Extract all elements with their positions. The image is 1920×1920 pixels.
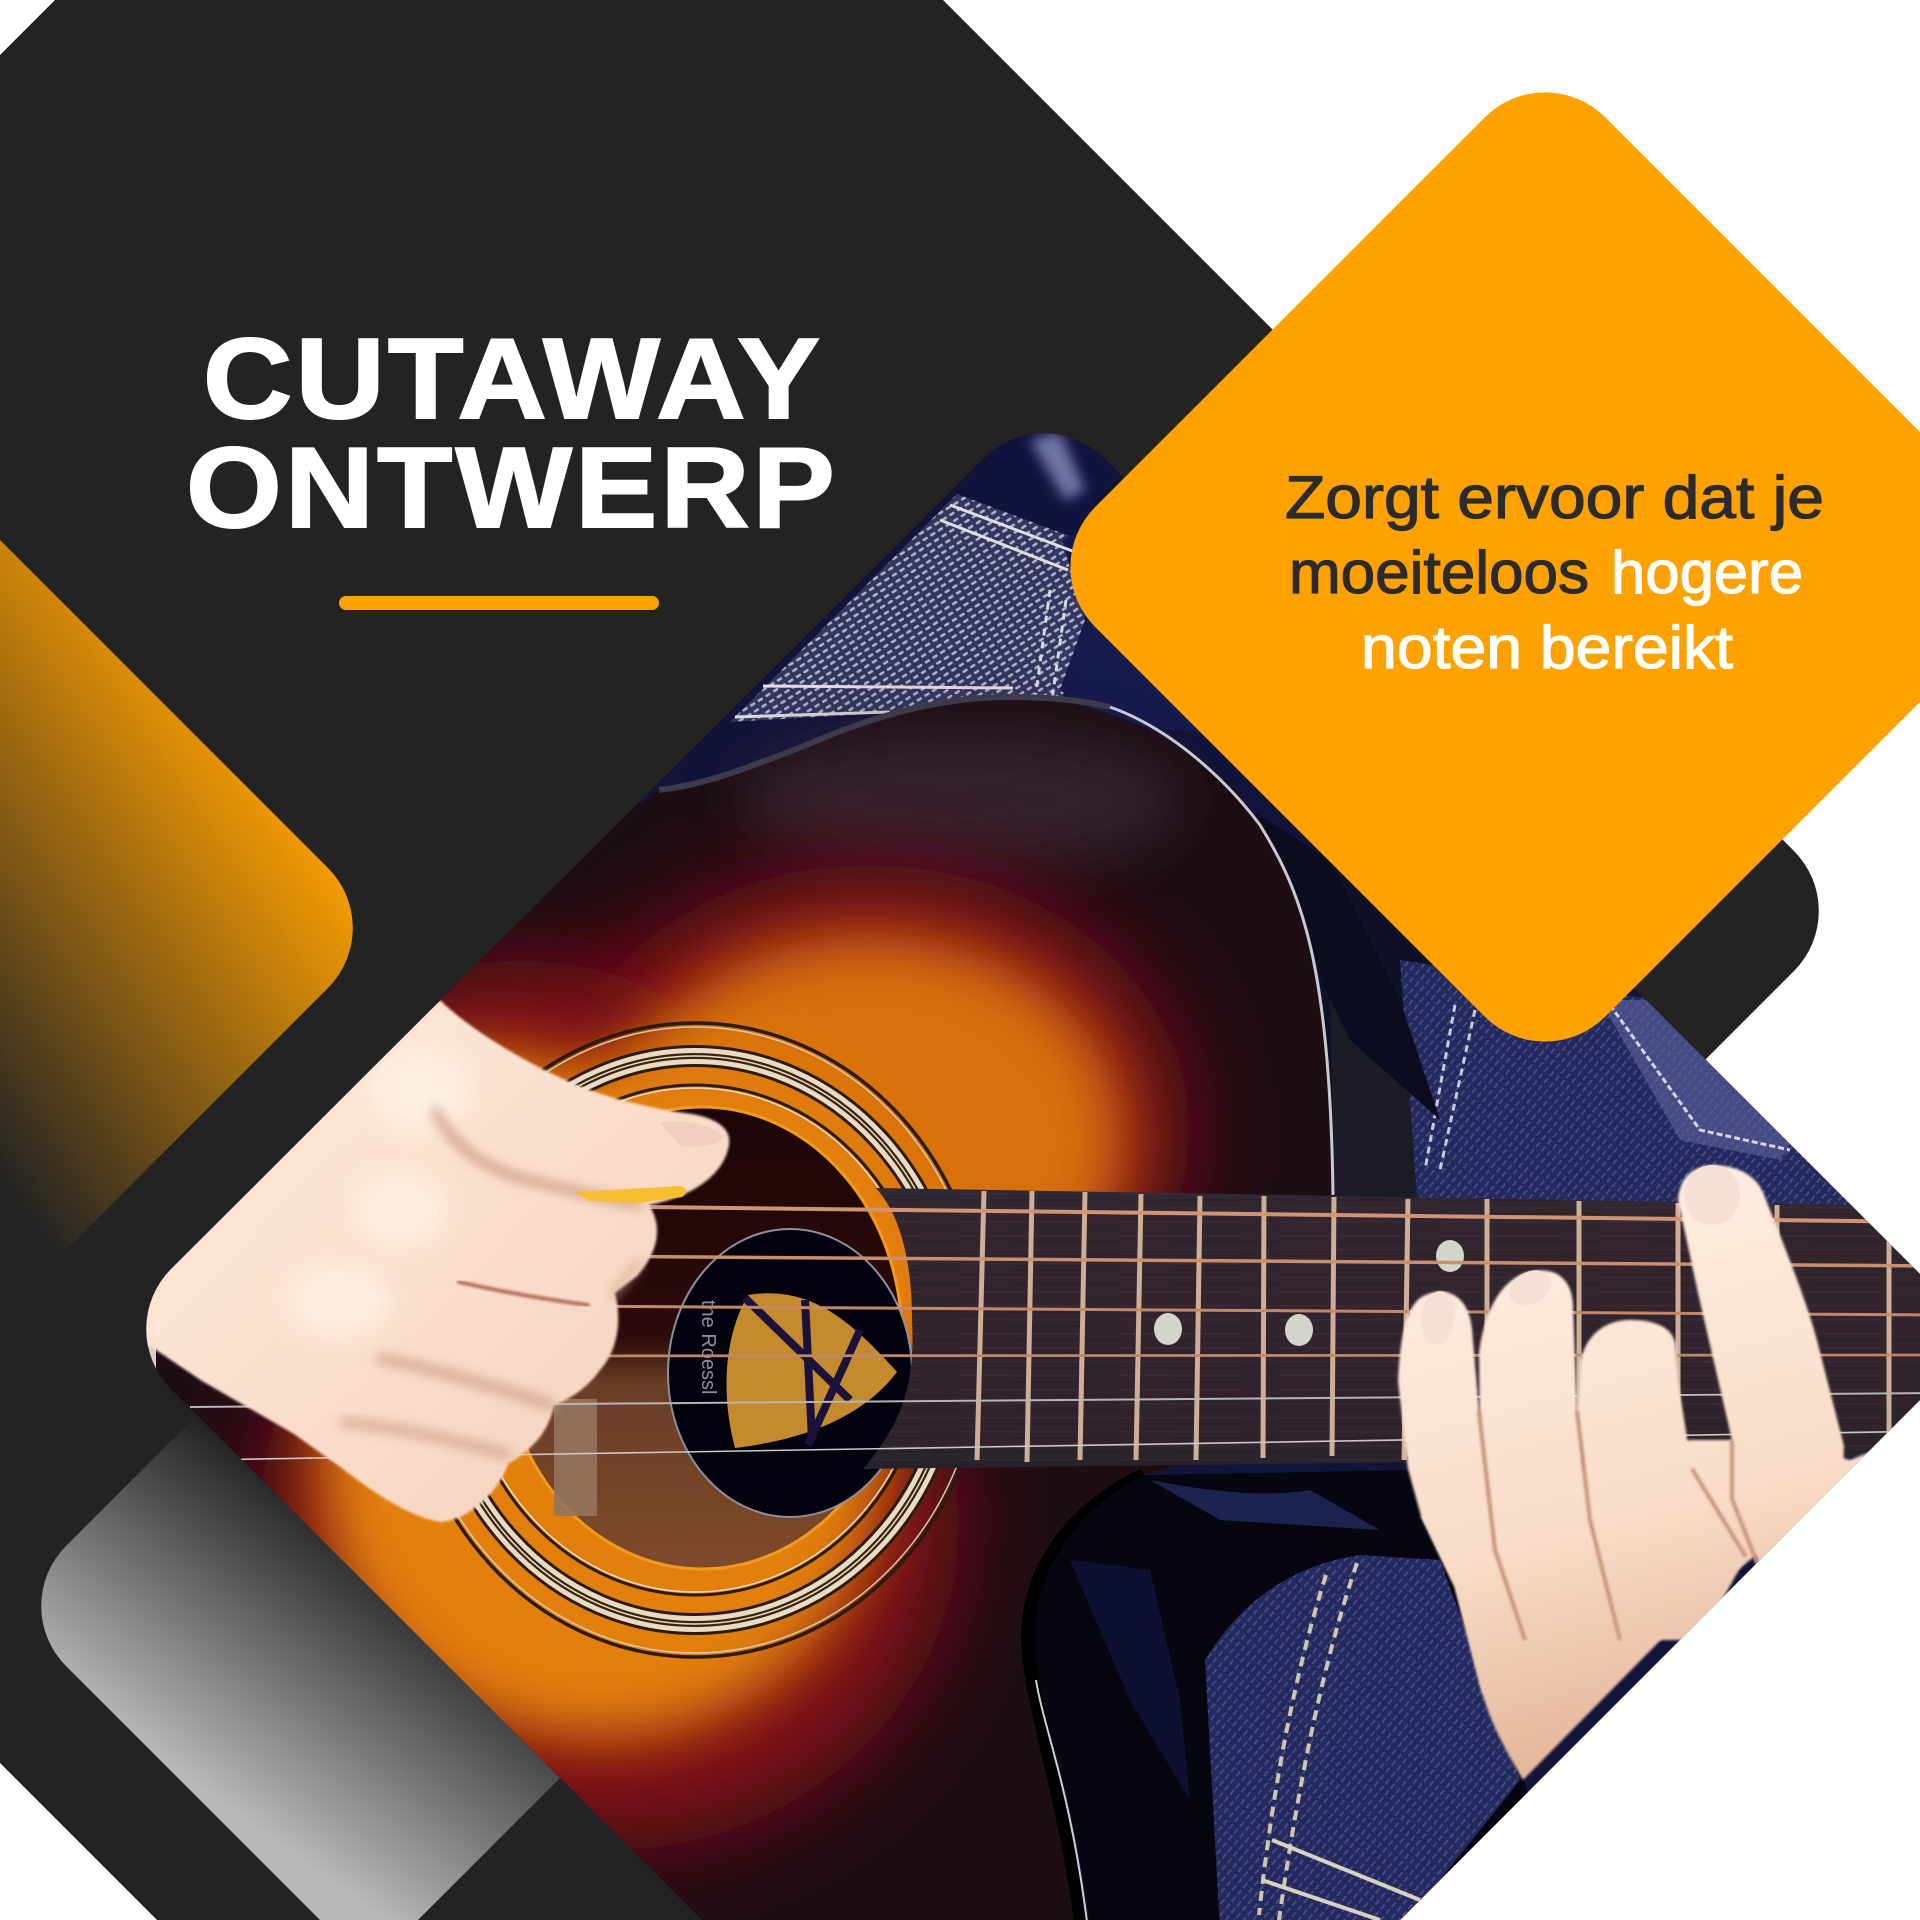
frets [977,1191,1889,1462]
inlay dots [1154,1240,1464,1346]
lower jeans and folds [1034,1470,1530,1920]
title: ONTWERP [186,425,838,552]
palm [1421,1440,1900,1780]
thumb and finger creases [343,1111,640,1455]
callout text: noten bereikt [1361,614,1733,681]
callout text: moeiteloos [1289,539,1589,606]
jeans upper textured patch [730,433,1202,734]
denim background [633,434,1920,1920]
title: CUTAWAY [203,316,823,443]
thumbnail [660,1121,724,1147]
photo: guitar player [100,380,1920,1920]
finger shadows [1479,1411,1760,1640]
callout text [1285,464,1824,681]
pinky [1678,1165,1844,1590]
orange callout diamond [1035,57,1920,1077]
callout text: hogere [1611,539,1803,606]
fingernails [1417,1165,1740,1347]
soundhole label [668,1229,912,1517]
title underline [339,596,659,610]
callout text: Zorgt ervoor dat je [1285,464,1824,531]
right fretting hand [1398,1165,1900,1780]
guitar body with sunburst [100,697,1333,1920]
soundhole [502,1107,902,1569]
title [186,316,838,552]
middle finger [1479,1270,1625,1700]
hand highlights [290,1050,470,1335]
guitar pick [575,1186,687,1203]
white binding strip at left tip [147,1340,156,1368]
left picking hand [100,1000,729,1522]
dark strap and right side denim [1250,810,1886,1240]
fretboard [863,1188,1920,1469]
soundhole rosette rings [453,1021,962,1659]
bracing inside soundhole [554,1399,597,1516]
gradient grey diamond bottom left [41,1312,560,1920]
soundhole label: the Roessl [697,1300,719,1394]
guitar strings [190,1206,1920,1460]
index finger [1398,1292,1525,1720]
gradient orange diamond left [0,540,353,1316]
ring finger [1578,1320,1746,1640]
